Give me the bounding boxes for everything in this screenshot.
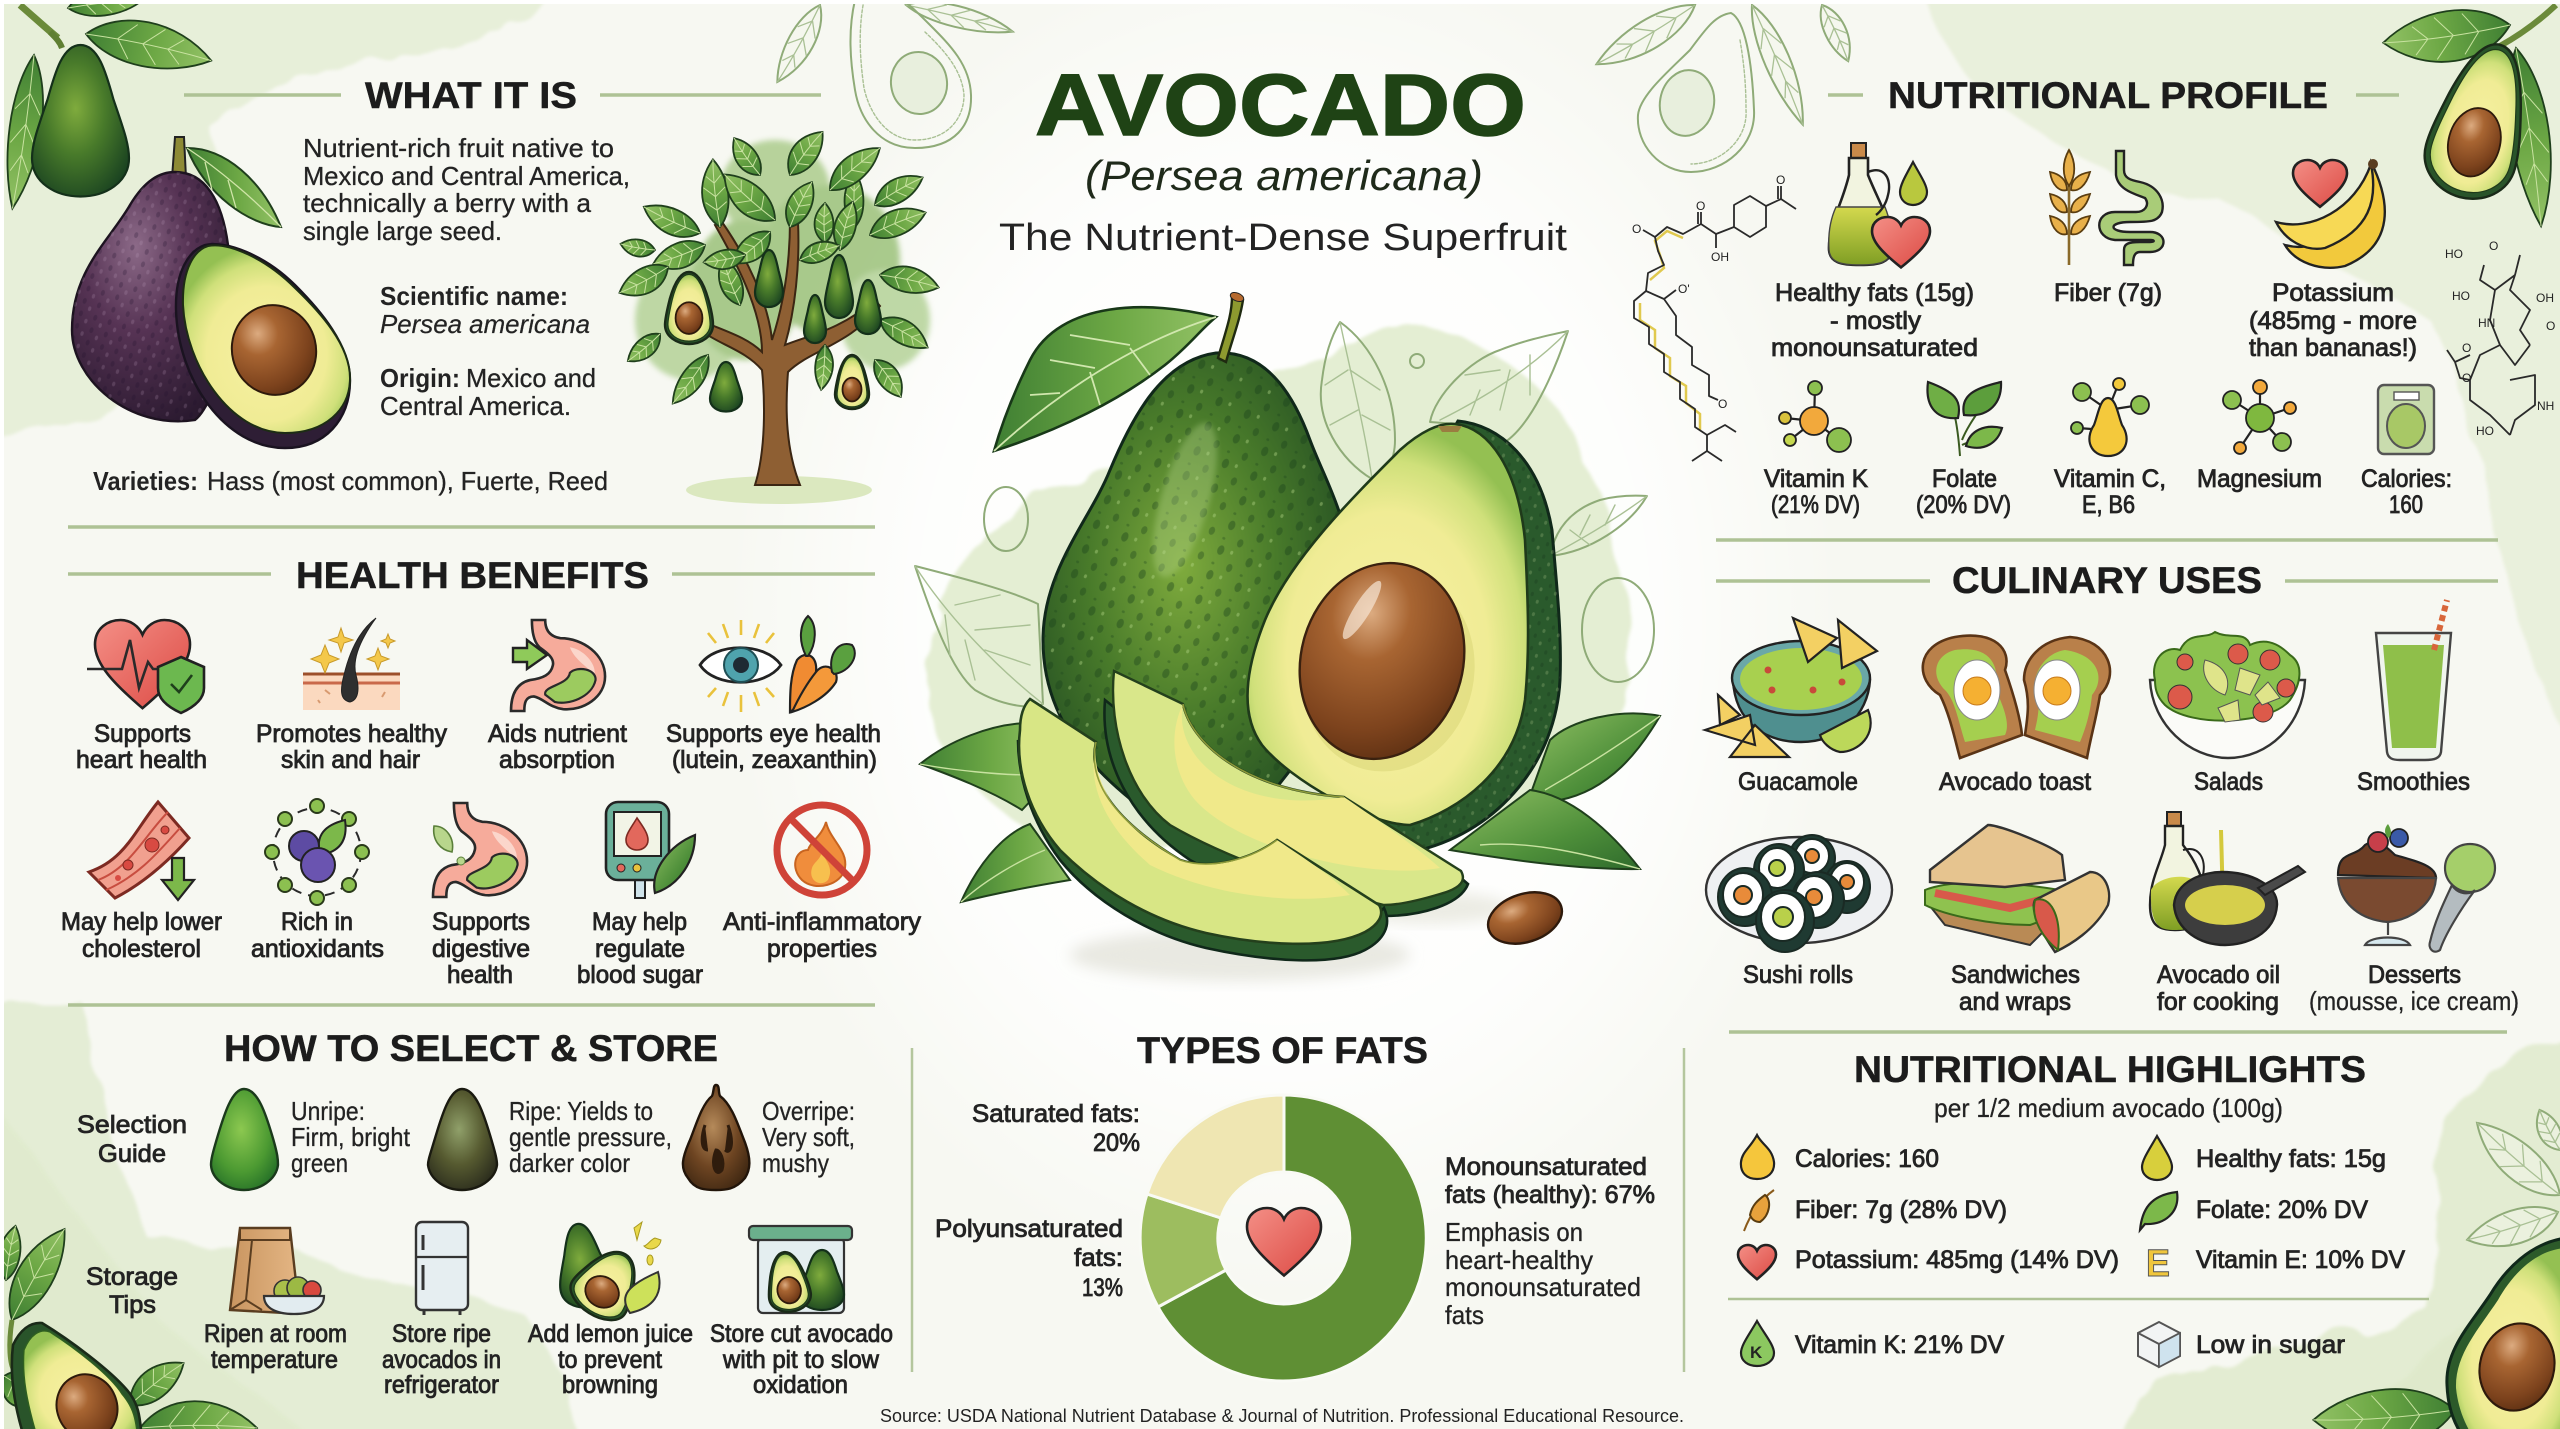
benefit: digestive health: Supports: [432, 908, 530, 936]
subtitle: latin name: (Persea americana): [1085, 152, 1483, 199]
row: fiber: Fiber: 7g (28% DV): [1795, 1196, 2007, 1224]
benefit: digestive health: [432, 803, 530, 989]
diagram: molecule right: HO: [2476, 424, 2494, 438]
text: description: [303, 133, 630, 246]
storage: lemon juice: browning: [562, 1371, 658, 1399]
use: guacamole: [1705, 618, 1877, 796]
benefit: anti-inflammatory: [723, 805, 922, 963]
icon: avocado tree: [614, 123, 942, 504]
loose pit: [1481, 883, 1569, 953]
use: avocado toast: Avocado toast: [1939, 768, 2091, 796]
use: avocado oil for cooking: [2150, 812, 2305, 1016]
selection: overripe: Very soft,: [762, 1122, 855, 1152]
subheading: serving size: per 1/2 medium avocado (100g): [1934, 1093, 2283, 1123]
row: vitamin e: Vitamin E: 10% DV: [2196, 1246, 2405, 1274]
benefit: nutrient absorption: absorption: [499, 746, 615, 774]
selection: ripe: darker color: [509, 1148, 630, 1178]
top-left sketch avocado and leaves: [767, 0, 1016, 148]
item: potassium: [2249, 159, 2417, 362]
row: vitamin k: [1741, 1321, 2004, 1366]
item: healthy fats: Healthy fats (15g): [1775, 279, 1974, 307]
diagram: fatty acid molecule: O: [1776, 173, 1785, 187]
benefit: blood sugar: regulate: [595, 935, 685, 963]
row: vitamin k: K: [1750, 1343, 1763, 1362]
selection: ripe: gentle pressure,: [509, 1122, 672, 1152]
text: scientific name: Persea americana: [380, 309, 590, 339]
benefit: antioxidants: antioxidants: [251, 935, 384, 963]
label: selection guide: [77, 1111, 187, 1168]
use: avocado oil for cooking: for cooking: [2157, 988, 2279, 1016]
section: culinary uses: [1705, 560, 2519, 1016]
row: folate: Folate: 20% DV: [2196, 1196, 2368, 1224]
whole avocado: [994, 291, 1352, 860]
benefit: digestive health: digestive: [432, 935, 530, 963]
selection: ripe: Ripe: Yields to: [509, 1096, 653, 1126]
benefit: eye health: [666, 616, 881, 774]
section: nutritional highlights: [1728, 1049, 2429, 1367]
benefit: anti-inflammatory: Anti-inflammatory: [723, 908, 922, 936]
section: types of fats: [935, 1030, 1655, 1381]
storage: lemon juice: to prevent: [558, 1346, 662, 1374]
benefit: heart health: heart health: [76, 746, 207, 774]
item: potassium: than bananas!): [2249, 334, 2417, 362]
label: monounsaturated fats: [1445, 1153, 1655, 1209]
icon: heart: [1247, 1208, 1321, 1276]
label: polyunsaturated fats: 13%: [1082, 1274, 1123, 1302]
storage: refrigerator: avocados in: [382, 1346, 501, 1374]
section: health benefits: [61, 555, 922, 989]
item: magnesium: [2197, 380, 2322, 493]
row: fiber: [1744, 1190, 2007, 1231]
diagram: fatty acid molecule: O: [1696, 199, 1705, 213]
item: vitamin c e b6: [2054, 378, 2166, 519]
benefit: eye health: Supports eye health: [666, 720, 881, 748]
heading: nutritional highlights: NUTRITIONAL HIGHLIGHTS: [1854, 1049, 2366, 1090]
item: vitamin c e b6: Vitamin C,: [2054, 465, 2166, 493]
row: vitamin e: E: [2146, 1243, 2170, 1285]
diagram: molecule right: O: [2546, 319, 2555, 333]
benefit: blood sugar: May help: [592, 908, 687, 936]
item: potassium: Potassium: [2272, 279, 2394, 307]
text: origin: Origin:: [380, 363, 460, 393]
text: varieties: Hass (most common), Fuerte, Reed: [207, 466, 608, 496]
diagram: molecule right: HO: [2445, 247, 2463, 261]
row: potassium: Potassium: 485mg (14% DV): [1795, 1246, 2119, 1274]
diagram: molecule right: O: [2462, 341, 2471, 355]
item: potassium: (485mg - more: [2249, 307, 2417, 335]
item: vitamin c e b6: E, B6: [2082, 491, 2135, 519]
selection: unripe: Firm, bright: [291, 1122, 411, 1152]
row: vitamin k: Vitamin K: 21% DV: [1795, 1331, 2004, 1359]
tagline: The Nutrient-Dense Superfruit: [999, 217, 1567, 259]
storage: refrigerator: refrigerator: [384, 1371, 499, 1399]
item: healthy fats: monounsaturated: [1771, 334, 1978, 362]
benefit: skin and hair: skin and hair: [281, 746, 420, 774]
storage: lemon juice: Add lemon juice: [528, 1320, 693, 1348]
item: fiber: [2050, 150, 2164, 307]
text: origin: [380, 363, 596, 421]
use: sandwiches and wraps: and wraps: [1959, 988, 2071, 1016]
item: fiber: Fiber (7g): [2054, 279, 2162, 307]
heading: how to select and store: HOW TO SELECT & STORE: [224, 1028, 718, 1069]
diagram: molecule right: O: [2462, 371, 2471, 385]
row: low in sugar: [2138, 1322, 2345, 1367]
item: vitamin k: Vitamin K: [1764, 465, 1868, 493]
storage: sealed container: [710, 1226, 893, 1399]
label: saturated fats: Saturated fats:: [972, 1100, 1140, 1128]
use: desserts: (mousse, ice cream): [2309, 986, 2519, 1016]
use: smoothie: [2357, 600, 2470, 796]
title block: [999, 57, 1567, 259]
text: description: single large seed.: [303, 216, 502, 246]
heading: types of fats: TYPES OF FATS: [1137, 1030, 1428, 1071]
diagram: fatty acid molecule: O: [1632, 222, 1641, 236]
top-left hanging avocado and leaves: [0, 0, 216, 211]
note: heart-healthy emphasis: heart-healthy: [1445, 1245, 1593, 1275]
selection: overripe: mushy: [762, 1148, 829, 1178]
storage: ripen at room temperature: Ripen at room: [204, 1320, 347, 1348]
text: scientific name: [380, 281, 590, 339]
avocado slices: [1018, 671, 1468, 960]
note: heart-healthy emphasis: Emphasis on: [1445, 1217, 1583, 1247]
donut chart: [1140, 1095, 1426, 1381]
row: healthy fats: Healthy fats: 15g: [2196, 1145, 2386, 1173]
use: desserts: Desserts: [2368, 961, 2461, 989]
label: polyunsaturated fats: fats:: [1074, 1244, 1123, 1272]
use: sandwiches and wraps: [1925, 825, 2109, 1016]
use: sandwiches and wraps: Sandwiches: [1951, 961, 2080, 989]
note: heart-healthy emphasis: [1445, 1217, 1641, 1330]
label: saturated fats: 20%: [1093, 1129, 1140, 1157]
title: AVOCADO: [1035, 57, 1526, 154]
benefit: skin and hair: [256, 618, 447, 774]
item: vitamin k: (21% DV): [1771, 491, 1860, 519]
label: polyunsaturated fats: [935, 1215, 1123, 1302]
benefit: digestive health: health: [447, 961, 513, 989]
storage: ripen at room temperature: temperature: [211, 1346, 338, 1374]
use: avocado oil for cooking: Avocado oil: [2157, 961, 2280, 989]
selection: unripe: Unripe:: [291, 1096, 365, 1126]
item: calories: Calories:: [2361, 465, 2452, 493]
row: low in sugar: Low in sugar: [2196, 1331, 2345, 1359]
storage: sealed container: Store cut avocado: [710, 1320, 893, 1348]
item: healthy fats: - mostly: [1830, 307, 1922, 335]
benefit: lower cholesterol: cholesterol: [82, 935, 201, 963]
benefit: anti-inflammatory: properties: [767, 935, 877, 963]
row: folate: [2140, 1192, 2368, 1230]
section: what it is: [72, 75, 942, 504]
top-right avocado and leaves: [2380, 3, 2560, 229]
text: varieties: Varieties:: [93, 466, 198, 496]
heading: culinary uses: CULINARY USES: [1952, 560, 2262, 601]
benefit: blood sugar: blood sugar: [577, 961, 703, 989]
storage: refrigerator: [382, 1222, 501, 1399]
text: origin: Central America.: [380, 391, 571, 421]
section: how to select and store: [77, 1028, 893, 1399]
item: vitamin k: [1764, 381, 1868, 519]
use: guacamole: Guacamole: [1738, 768, 1858, 796]
use: salad: [2150, 632, 2305, 796]
item: magnesium: Magnesium: [2197, 465, 2322, 493]
benefit: heart health: Supports: [94, 720, 191, 748]
use: sushi rolls: [1706, 835, 1892, 989]
benefit: blood sugar: [577, 802, 703, 989]
label: saturated fats: [972, 1100, 1140, 1157]
use: desserts: [2309, 824, 2519, 1016]
benefit: antioxidants: Rich in: [281, 908, 353, 936]
item: folate: [1916, 382, 2011, 519]
selection: overripe: Overripe:: [762, 1096, 855, 1126]
benefit: antioxidants: [251, 799, 384, 963]
row: calories: Calories: 160: [1795, 1145, 1939, 1173]
use: smoothie: Smoothies: [2357, 768, 2470, 796]
use: avocado toast: [1923, 636, 2110, 796]
text: origin: Mexico and: [466, 363, 596, 393]
note: heart-healthy emphasis: fats: [1445, 1300, 1484, 1330]
use: sushi rolls: Sushi rolls: [1743, 961, 1853, 989]
row: calories: [1741, 1135, 1939, 1179]
storage: sealed container: oxidation: [753, 1371, 848, 1399]
item: healthy fats: [1771, 143, 1978, 362]
item: folate: (20% DV): [1916, 491, 2011, 519]
item: calories: 160: [2389, 491, 2423, 519]
benefit: nutrient absorption: Aids nutrient: [488, 720, 627, 748]
section: nutritional profile: [1632, 75, 2555, 519]
benefit: lower cholesterol: [61, 802, 222, 963]
use: salad: Salads: [2194, 768, 2263, 796]
heading: health benefits: HEALTH BENEFITS: [296, 555, 649, 596]
text: description: Mexico and Central America,: [303, 161, 630, 191]
label: storage tips: Tips: [109, 1291, 156, 1319]
cut avocado half with seed: [1248, 421, 1560, 850]
diagram: molecule right: OH: [2536, 291, 2554, 305]
label: selection guide: Guide: [98, 1140, 166, 1168]
benefit: eye health: (lutein, zeaxanthin): [672, 746, 877, 774]
item: calories: [2361, 385, 2452, 519]
selection: unripe: [211, 1089, 411, 1190]
label: storage tips: [86, 1263, 178, 1319]
row: healthy fats: [2142, 1136, 2386, 1180]
diagram: fatty acid molecule: OH: [1711, 250, 1729, 264]
bottom-right avocado and leaves: [2312, 1106, 2560, 1429]
benefit: heart health: [76, 620, 207, 774]
benefit: nutrient absorption: [488, 620, 627, 774]
benefit: lower cholesterol: May help lower: [61, 908, 222, 936]
row: vitamin e: [2146, 1243, 2405, 1285]
label: storage tips: Storage: [86, 1263, 178, 1291]
storage: ripen at room temperature: [204, 1228, 347, 1374]
diagram: molecule right: HO: [2452, 289, 2470, 303]
diagram: molecule right: NH: [2537, 399, 2554, 413]
selection: ripe: [428, 1089, 672, 1190]
heading: what it is: WHAT IT IS: [365, 75, 577, 116]
source note: Source: USDA National Nutrient Database & Journal of Nutrition. Professional Educational Resource.: [880, 1405, 1684, 1426]
diagram: molecule right: HN: [2478, 316, 2495, 330]
storage: refrigerator: Store ripe: [392, 1320, 491, 1348]
label: monounsaturated fats: Monounsaturated: [1445, 1153, 1647, 1181]
diagram: fatty acid molecule: O': [1678, 282, 1690, 296]
text: description: Nutrient-rich fruit native to: [303, 133, 614, 163]
row: potassium: [1738, 1245, 2119, 1279]
benefit: skin and hair: Promotes healthy: [256, 720, 447, 748]
label: polyunsaturated fats: Polyunsaturated: [935, 1215, 1123, 1243]
diagram: molecule right: O: [2489, 239, 2498, 253]
top-right sketch avocado and leaves: [1590, 0, 1859, 172]
divider lines around types of fats: [911, 1048, 913, 1372]
label: selection guide: Selection: [77, 1111, 187, 1139]
diagram: fatty acid molecule: O: [1718, 397, 1727, 411]
centre white glow: [724, 0, 1844, 1300]
icon: purple avocado with cut half: [72, 137, 350, 448]
storage: lemon juice: [528, 1220, 693, 1399]
selection: unripe: green: [291, 1148, 348, 1178]
diagram: molecule right: [2445, 239, 2555, 438]
hero illustration: avocado: [915, 291, 1660, 981]
text: scientific name: Scientific name:: [380, 281, 568, 311]
heading: nutritional profile: NUTRITIONAL PROFILE: [1888, 75, 2328, 116]
diagram: fatty acid molecule: [1632, 173, 1796, 461]
selection: overripe: [683, 1085, 855, 1190]
note: heart-healthy emphasis: monounsaturated: [1445, 1272, 1641, 1302]
item: folate: Folate: [1932, 465, 1997, 493]
storage: sealed container: with pit to slow: [722, 1346, 880, 1374]
text: description: technically a berry with a: [303, 188, 592, 218]
label: monounsaturated fats: fats (healthy): 67%: [1445, 1181, 1655, 1209]
